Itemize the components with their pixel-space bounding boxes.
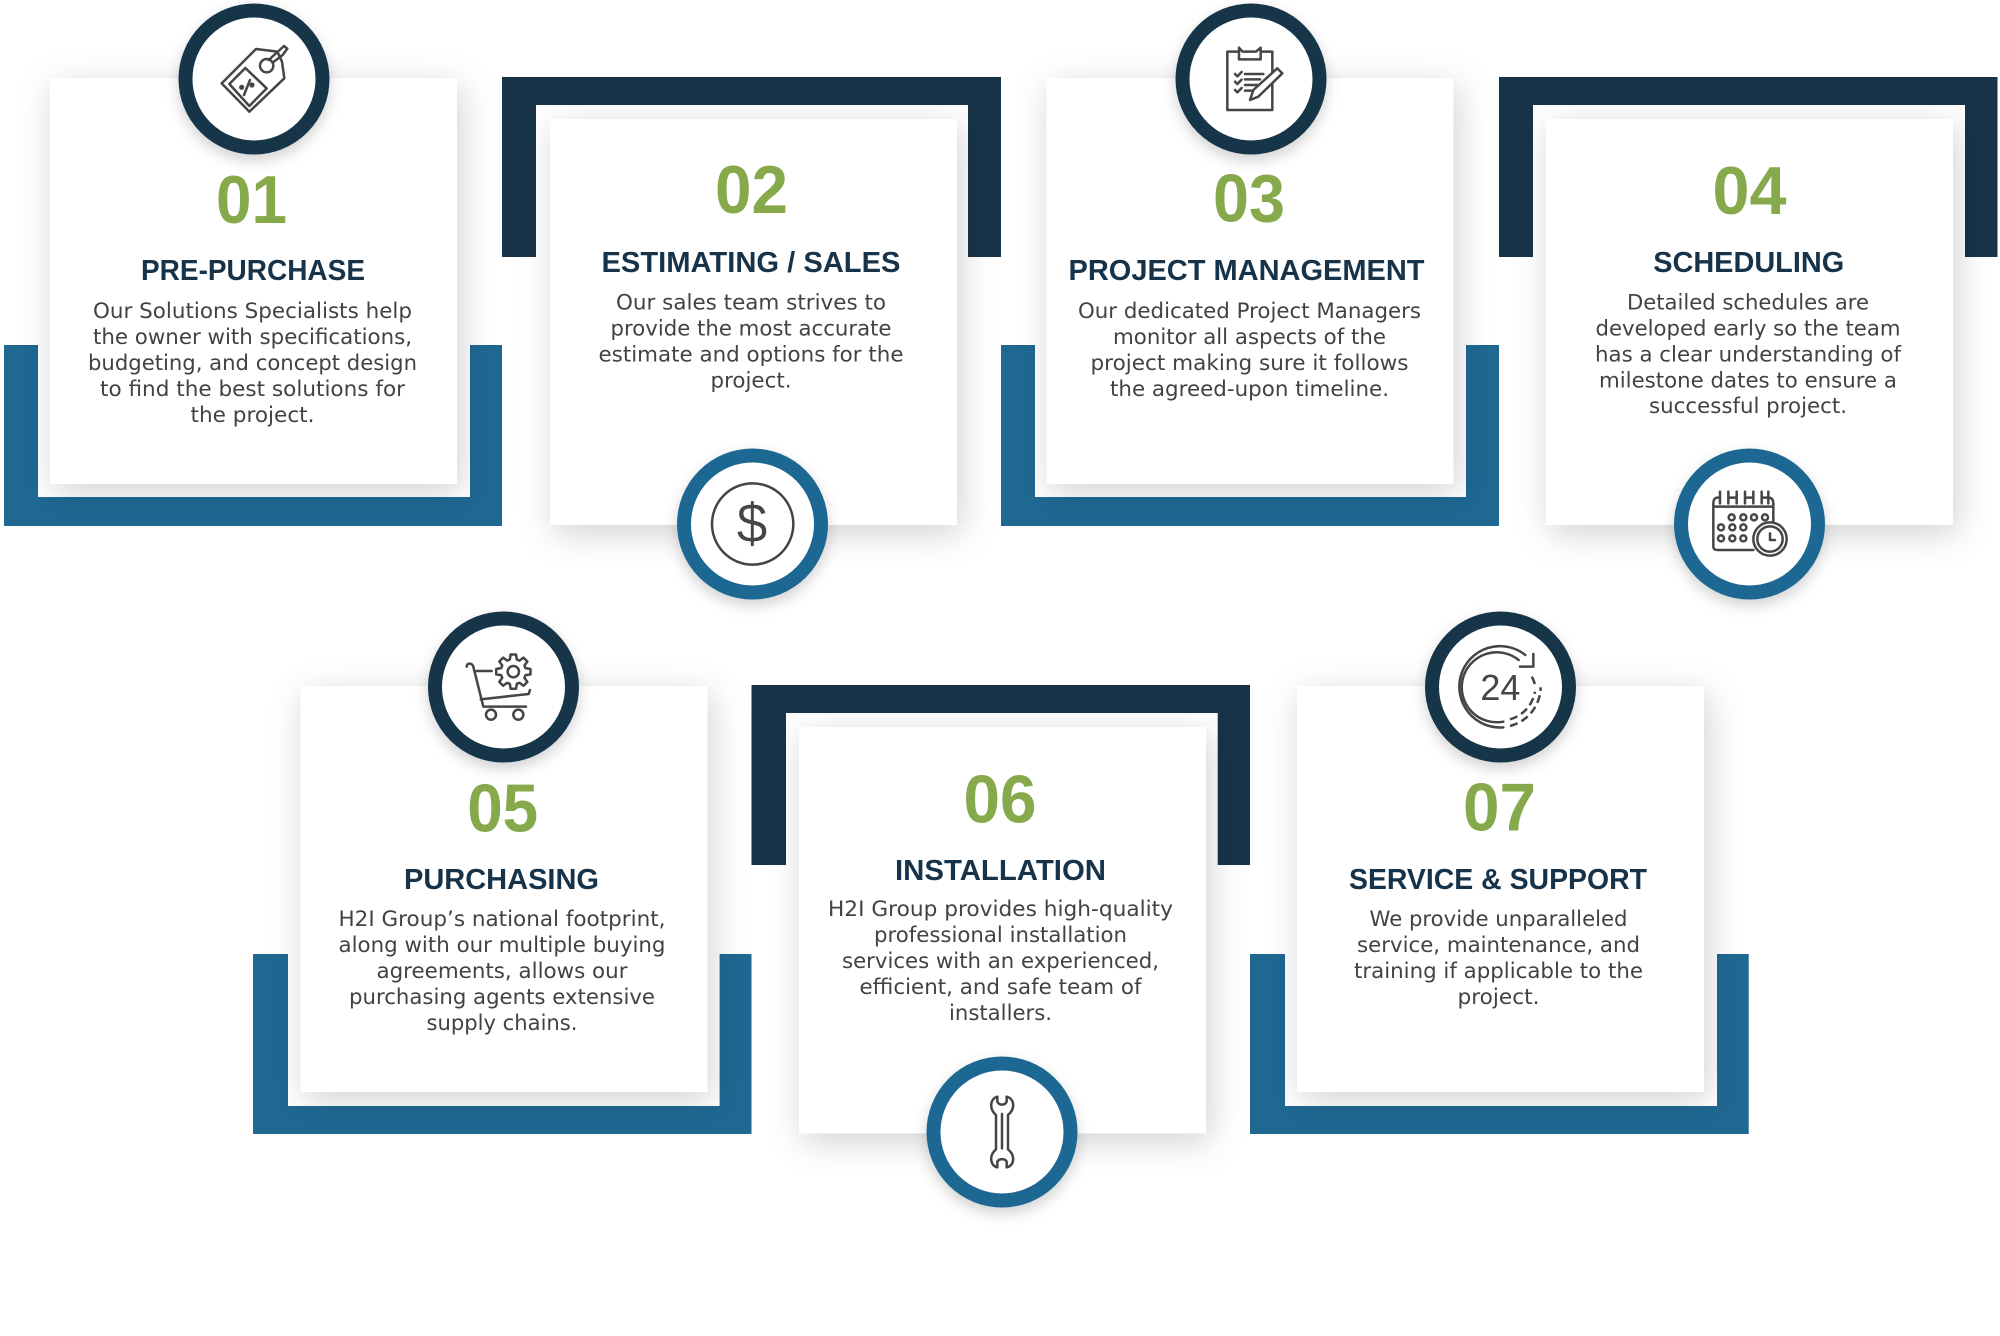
body text: successful project. xyxy=(1649,394,1847,418)
body text xyxy=(598,290,904,392)
body text: Our Solutions Specialists help xyxy=(93,299,412,323)
icon ring xyxy=(934,1064,1070,1200)
body text: along with our multiple buying xyxy=(338,933,666,957)
body text xyxy=(828,897,1173,1025)
blue bracket xyxy=(253,954,752,1134)
body text: H2I Group provides high-quality xyxy=(828,897,1173,921)
heading: PRE-PURCHASE xyxy=(141,255,365,287)
heading: ESTIMATING / SALES xyxy=(602,247,900,279)
body text: H2I Group’s national footprint, xyxy=(338,907,666,931)
body text: the owner with specifications, xyxy=(93,325,412,349)
number: 04 xyxy=(1712,153,1787,229)
blue bracket xyxy=(1250,954,1749,1134)
body text xyxy=(1595,290,1902,418)
body text: Our dedicated Project Managers xyxy=(1078,299,1421,323)
icon ring xyxy=(435,618,572,756)
body text: installers. xyxy=(949,1001,1052,1025)
body text: Our sales team strives to xyxy=(616,290,886,314)
icon: price tag xyxy=(222,46,287,112)
panel: 02 estimating / sales xyxy=(502,77,1001,592)
heading: SERVICE & SUPPORT xyxy=(1349,864,1647,896)
icon ring xyxy=(1182,10,1320,148)
body text: project making sure it follows xyxy=(1090,351,1408,375)
blue bracket xyxy=(4,345,502,526)
number: 07 xyxy=(1463,770,1536,846)
card xyxy=(300,686,708,1092)
heading: PROJECT MANAGEMENT xyxy=(1068,255,1425,287)
panel: 03 project management xyxy=(1001,10,1499,526)
icon ring xyxy=(186,10,322,148)
body text: We provide unparalleled xyxy=(1370,907,1628,931)
body text: the project. xyxy=(190,403,314,427)
body text: project. xyxy=(1458,985,1540,1009)
body text: monitor all aspects of the xyxy=(1113,325,1386,349)
icon: wrench xyxy=(991,1097,1013,1167)
navy bracket xyxy=(1499,77,1998,257)
number: 05 xyxy=(467,770,538,846)
blue bracket xyxy=(1001,345,1499,526)
body text xyxy=(1354,907,1643,1009)
navy bracket xyxy=(752,685,1250,865)
body text: Detailed schedules are xyxy=(1627,290,1869,314)
body text: professional installation xyxy=(874,923,1127,947)
heading: INSTALLATION xyxy=(895,855,1106,887)
number: 02 xyxy=(715,152,788,228)
heading: SCHEDULING xyxy=(1653,247,1844,279)
body text: provide the most accurate xyxy=(610,316,892,340)
icon ring xyxy=(684,456,821,592)
body text xyxy=(1078,299,1421,401)
navy bracket xyxy=(502,77,1001,257)
icon: dollar coin xyxy=(712,483,793,565)
body text: the agreed-upon timeline. xyxy=(1110,377,1389,401)
body text: efficient, and safe team of xyxy=(860,975,1142,999)
body text xyxy=(338,907,666,1035)
body text: has a clear understanding of xyxy=(1595,342,1902,366)
icon: dollar coin: $ xyxy=(737,493,767,555)
panel: 07 service and support xyxy=(1250,618,1749,1134)
body text: to find the best solutions for xyxy=(100,377,405,401)
body text: developed early so the team xyxy=(1596,316,1900,340)
card xyxy=(1046,78,1454,484)
card xyxy=(50,78,457,484)
number: 01 xyxy=(216,162,287,238)
number: 06 xyxy=(964,762,1036,838)
body text: supply chains. xyxy=(426,1011,578,1035)
panel: 04 scheduling xyxy=(1499,77,1998,592)
card xyxy=(1297,686,1704,1092)
icon: calendar and clock xyxy=(1713,492,1787,556)
icon: cart with gear xyxy=(467,655,530,720)
card xyxy=(1546,119,1953,525)
body text: purchasing agents extensive xyxy=(349,985,655,1009)
body text: agreements, allows our xyxy=(376,959,628,983)
icon ring xyxy=(1432,618,1569,756)
icon: 24 hour clock arrow xyxy=(1459,646,1541,727)
body text: project. xyxy=(710,368,792,392)
heading: PURCHASING xyxy=(404,864,599,896)
body text xyxy=(88,299,417,427)
body text: estimate and options for the xyxy=(598,342,904,366)
card xyxy=(550,119,957,525)
body text: service, maintenance, and xyxy=(1357,933,1640,957)
panel: 05 purchasing xyxy=(253,618,752,1134)
body text: milestone dates to ensure a xyxy=(1599,368,1897,392)
icon: 24 hour clock arrow: 24 xyxy=(1480,667,1520,708)
number: 03 xyxy=(1213,160,1285,236)
body text: training if applicable to the xyxy=(1354,959,1643,983)
icon ring xyxy=(1681,456,1818,592)
card xyxy=(799,727,1206,1134)
panel: 01 pre-purchase xyxy=(4,10,502,526)
body text: services with an experienced, xyxy=(842,949,1159,973)
body text: budgeting, and concept design xyxy=(88,351,417,375)
panel: 06 installation xyxy=(752,685,1250,1200)
icon: clipboard and pencil xyxy=(1227,48,1282,110)
